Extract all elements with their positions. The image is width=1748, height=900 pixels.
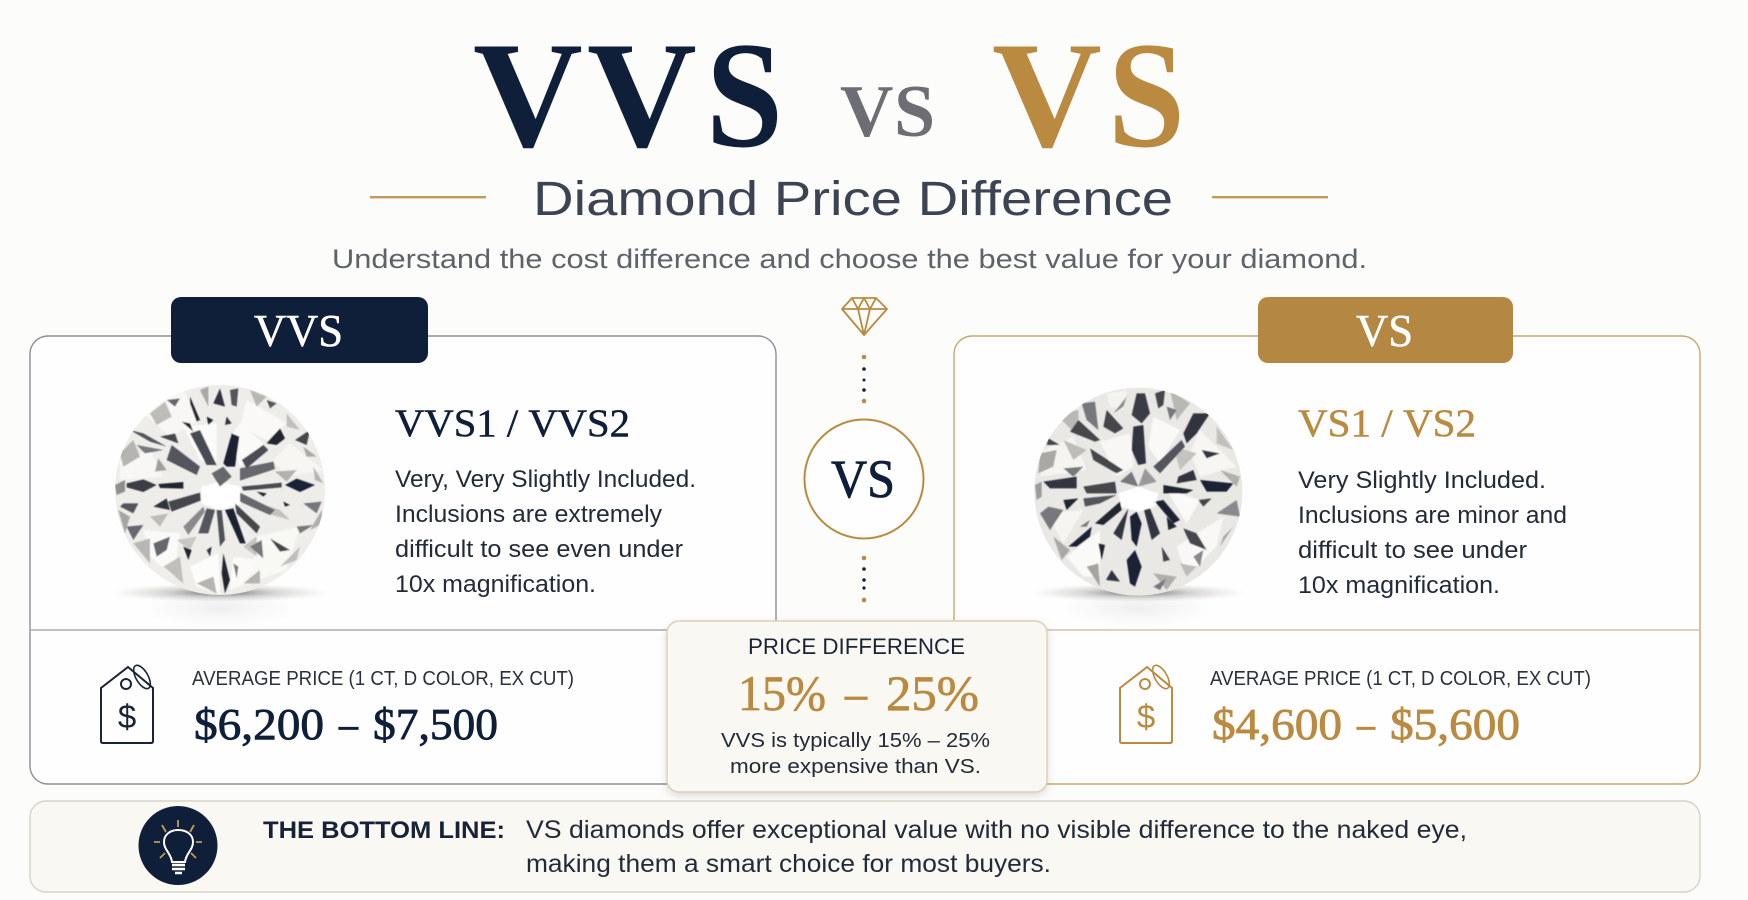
VS tab — [1258, 297, 1513, 363]
VS description: Inclusions are minor and — [1298, 502, 1567, 529]
callout figure: 25% — [886, 665, 979, 721]
VS tab: VS — [1356, 305, 1413, 356]
callout text: VVS is typically 15% – 25% — [721, 729, 990, 752]
VVS description — [395, 466, 696, 598]
dots: lower — [862, 556, 866, 602]
callout: price difference — [667, 621, 1047, 792]
VVS diamond — [110, 385, 330, 628]
VVS price: – — [338, 700, 359, 749]
title word: VVS: S — [706, 11, 783, 179]
callout text — [721, 729, 990, 778]
VVS price: $6,200 — [194, 700, 324, 749]
VS price — [1212, 700, 1520, 749]
title word: VS: V — [992, 11, 1102, 179]
VS price: $5,600 — [1390, 700, 1520, 749]
bottom line text — [526, 816, 1467, 878]
VVS grade heading: VVS1 / VVS2 — [395, 402, 630, 445]
VVS description: difficult to see even under — [395, 536, 683, 563]
VVS tab: VVS — [254, 305, 343, 356]
icon: VS price tag — [1120, 663, 1173, 743]
VS description: Very Slightly Included. — [1298, 467, 1546, 494]
panel: VS — [954, 297, 1700, 784]
bottom line label: THE BOTTOM LINE: — [263, 817, 505, 844]
VVS tab — [171, 297, 428, 363]
VS grade heading: VS1 / VS2 — [1298, 402, 1476, 445]
callout figure: 15% — [738, 665, 826, 721]
bottom line text: making them a smart choice for most buyers. — [526, 850, 1051, 878]
VS badge: VS — [831, 449, 895, 509]
dots: upper — [862, 355, 866, 403]
VS description — [1298, 467, 1567, 599]
title word: VVS: VV — [473, 11, 697, 179]
icon: light bulb — [138, 806, 218, 885]
VVS description: 10x magnification. — [395, 571, 596, 598]
VS price label: AVERAGE PRICE (1 CT, D COLOR, EX CUT) — [1210, 668, 1591, 690]
icon: VVS price tag — [101, 663, 154, 743]
callout text: more expensive than VS. — [730, 755, 981, 778]
icon: VVS price tag: $ — [118, 698, 136, 735]
VVS price: $7,500 — [373, 700, 498, 749]
panel: VVS — [30, 297, 776, 784]
callout heading: PRICE DIFFERENCE — [748, 634, 965, 659]
VVS price label: AVERAGE PRICE (1 CT, D COLOR, EX CUT) — [192, 668, 574, 690]
VVS description: Very, Very Slightly Included. — [395, 466, 696, 493]
icon: VS price tag: $ — [1137, 698, 1155, 735]
VS price: $4,600 — [1212, 700, 1342, 749]
VS description: 10x magnification. — [1298, 572, 1500, 599]
subtitle: Diamond Price Difference — [533, 173, 1173, 226]
VVS description: Inclusions are extremely — [395, 501, 662, 528]
bottom line text: VS diamonds offer exceptional value with no visible difference to the naked eye, — [526, 816, 1467, 844]
title word: VS: S — [1108, 11, 1185, 179]
VS price: – — [1356, 700, 1376, 749]
icon: gem — [842, 298, 887, 335]
center divider — [804, 298, 924, 602]
panel: bottom line — [30, 801, 1700, 892]
title — [473, 11, 1185, 179]
VS diamond — [1030, 388, 1247, 628]
callout figure: – — [844, 665, 868, 721]
VVS price — [194, 700, 498, 749]
title word: vs: VS — [840, 71, 935, 153]
VS badge — [804, 420, 924, 538]
VS description: difficult to see under — [1298, 537, 1527, 564]
tagline: Understand the cost difference and choose the best value for your diamond. — [332, 244, 1367, 274]
callout figure — [738, 665, 979, 721]
